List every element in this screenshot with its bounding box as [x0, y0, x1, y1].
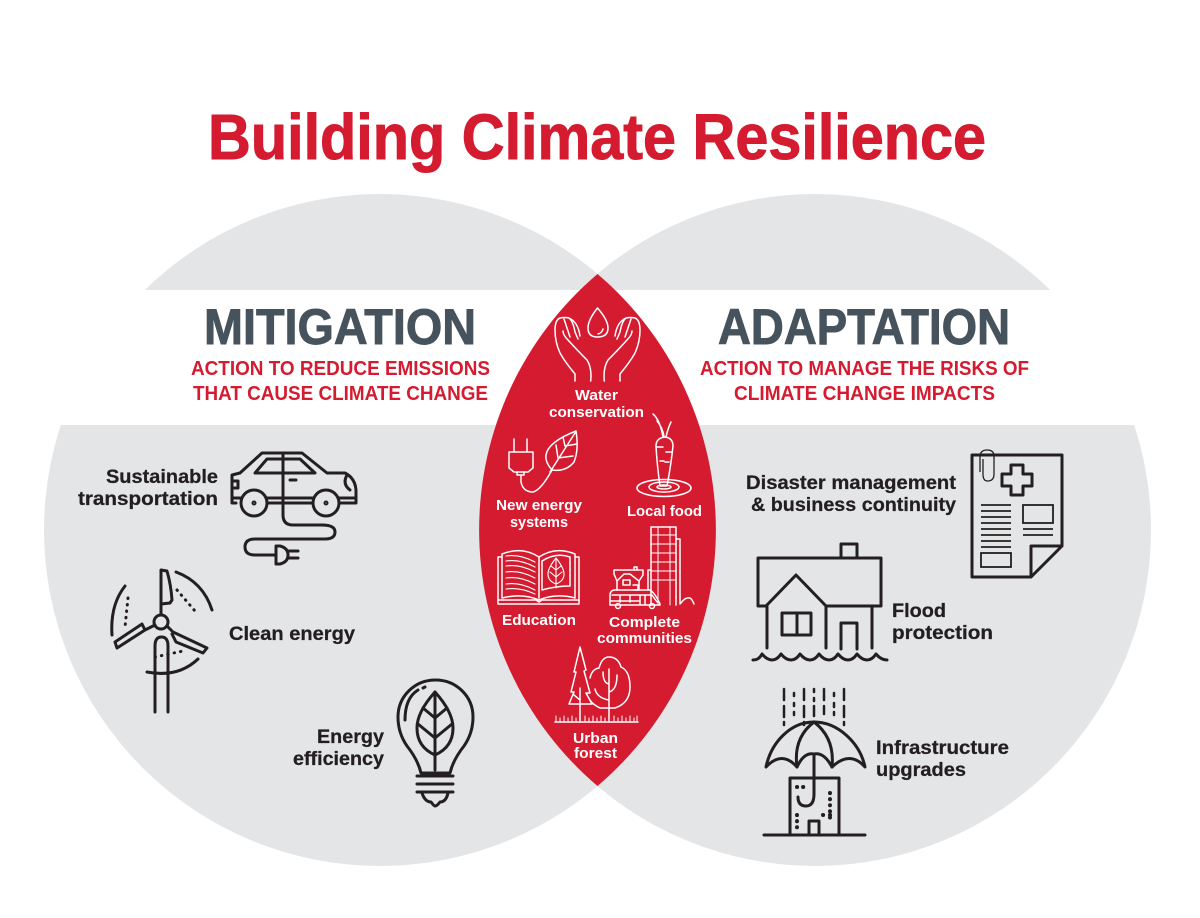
icon: umbrella over building: [764, 689, 865, 835]
label: infrastructure upgrades: [876, 738, 1009, 781]
icon: hands and water drop: [555, 308, 640, 381]
label: local food: Local food: [627, 504, 702, 520]
label: clean energy: Clean energy: [229, 624, 355, 645]
label: flood protection: Flood: [892, 601, 946, 622]
icon: wind turbine: [112, 570, 212, 712]
label: sustainable transportation: transportation: [78, 489, 218, 510]
label: water conservation: Water: [575, 388, 618, 404]
circle: mitigation: [44, 194, 716, 866]
venn diagram background: [0, 194, 1200, 866]
icon: electric car: [232, 453, 356, 564]
subheading: adaptation: CLIMATE CHANGE IMPACTS: [734, 382, 995, 405]
label: disaster management: & business continuity: [751, 495, 956, 516]
subheading: adaptation: ACTION TO MANAGE THE RISKS OF: [700, 357, 1029, 380]
icon: plug and leaf: [509, 431, 577, 492]
icon: flooded house: [753, 544, 887, 660]
label: disaster management: Disaster management: [746, 473, 957, 494]
subheading: mitigation: [191, 357, 490, 405]
label: flood protection: protection: [892, 623, 993, 644]
right hand: [604, 318, 640, 381]
icon: light bulb with leaf: [398, 680, 473, 806]
label: water conservation: [549, 388, 644, 421]
label: sustainable transportation: [78, 467, 218, 510]
heading: mitigation: MITIGATION: [204, 299, 476, 355]
label: new energy systems: systems: [510, 515, 568, 531]
label: education: Education: [502, 613, 576, 629]
icon: open book: [498, 551, 579, 604]
label: flood protection: [892, 601, 993, 644]
label: complete communities: communities: [597, 631, 692, 647]
panel: mitigation items: [78, 453, 473, 806]
title: Building Climate Resilience: [208, 101, 986, 173]
panel: adaptation items: [746, 450, 1062, 835]
label: urban forest: Urban: [573, 731, 618, 747]
label: complete communities: Complete: [609, 615, 680, 631]
label: energy efficiency: efficiency: [293, 749, 384, 770]
label: disaster management: [746, 473, 957, 516]
icon: carrot: [637, 414, 691, 496]
panel: mitigation heading: [191, 299, 490, 405]
label: water conservation: conservation: [549, 405, 644, 421]
heading: adaptation: ADAPTATION: [718, 299, 1010, 355]
label: infrastructure upgrades: upgrades: [876, 760, 966, 781]
label: new energy systems: New energy: [496, 498, 582, 514]
white heading band: [0, 290, 1200, 425]
subheading: mitigation: ACTION TO REDUCE EMISSIONS: [191, 357, 490, 380]
icon: trees: [555, 647, 638, 722]
icon: medical document: [972, 450, 1062, 577]
subheading: mitigation: THAT CAUSE CLIMATE CHANGE: [193, 382, 488, 405]
label: urban forest: [573, 731, 618, 762]
label: urban forest: forest: [574, 746, 617, 762]
panel: overlap actions: [496, 308, 702, 762]
label: infrastructure upgrades: Infrastructure: [876, 738, 1009, 759]
label: complete communities: [597, 615, 692, 647]
label: sustainable transportation: Sustainable: [106, 467, 218, 488]
panel: adaptation heading: [700, 299, 1029, 405]
label: energy efficiency: [293, 727, 384, 770]
label: energy efficiency: Energy: [317, 727, 384, 748]
label: new energy systems: [496, 498, 582, 531]
subheading: adaptation: [700, 357, 1029, 405]
circle: adaptation: [479, 194, 1151, 866]
overlap lens: [479, 274, 716, 786]
icon: tower, house and bus: [610, 527, 694, 608]
left hand: [555, 318, 591, 381]
